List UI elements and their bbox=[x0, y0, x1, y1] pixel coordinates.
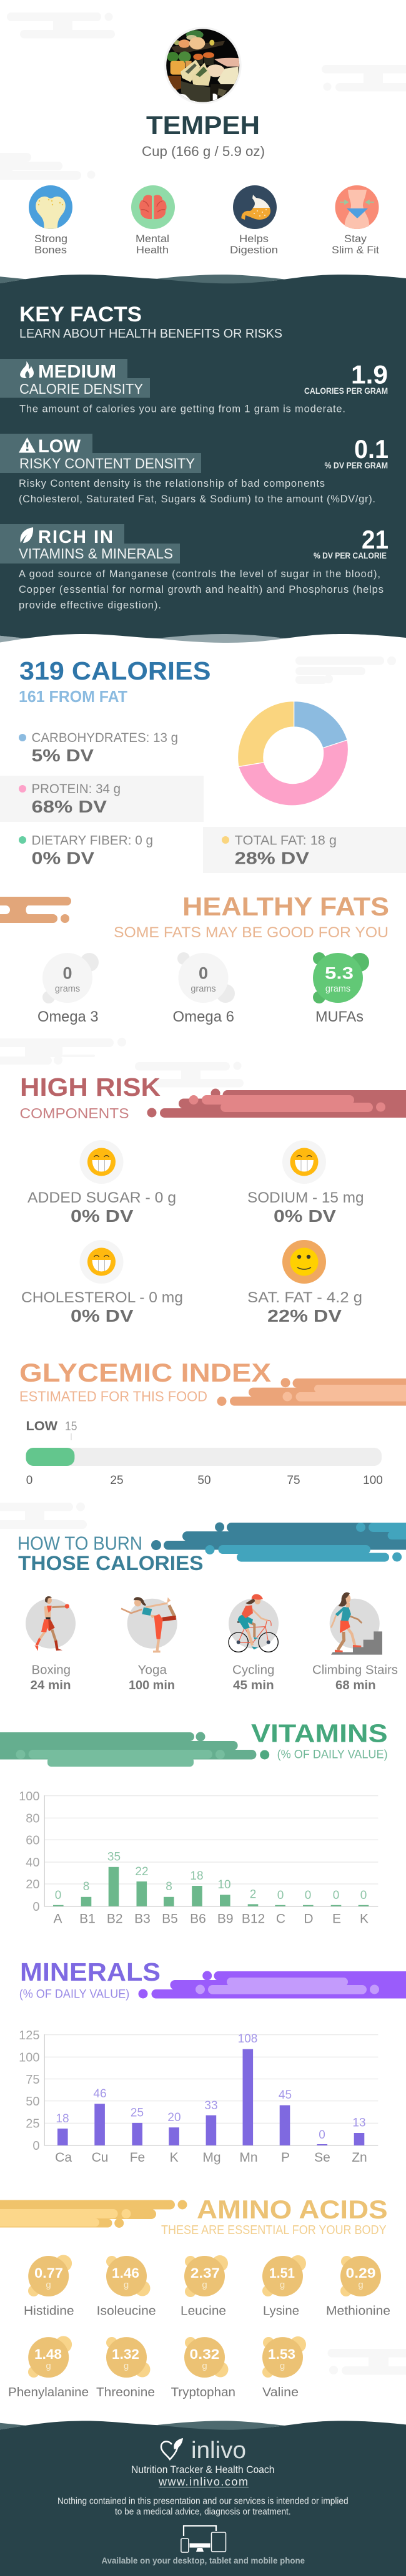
fact: risky content density: (Cholesterol, Saturated Fat, Sugars & Sodium) to the amount (%DV/gr). bbox=[19, 494, 375, 505]
bar chart: vitamins: 60 bbox=[26, 1833, 40, 1847]
omega 6: Omega 6 bbox=[172, 1008, 234, 1025]
header graphic: amino acids bbox=[0, 2200, 187, 2228]
risk: saturated fat: SAT. FAT - 4.2 g bbox=[247, 1289, 362, 1306]
isoleucine: Isoleucine bbox=[97, 2304, 156, 2318]
bar chart: vitamins: 18 bbox=[190, 1870, 204, 1883]
header graphic: healthy fats bbox=[0, 897, 71, 923]
donut chart bbox=[238, 701, 348, 806]
methionine: Methionine bbox=[326, 2304, 390, 2318]
subheading: components: COMPONENTS bbox=[20, 1105, 129, 1121]
label: helps digestion bbox=[230, 233, 278, 256]
fact: risky content density: % DV PER GRAM bbox=[325, 461, 388, 470]
fact: risky content density: RISKY CONTENT DENSITY bbox=[19, 455, 195, 471]
risk: cholesterol: 0% DV bbox=[71, 1306, 134, 1325]
bar chart: minerals: 0 bbox=[32, 2139, 40, 2153]
label: mental health: Health bbox=[136, 244, 169, 256]
label: strong bones bbox=[34, 233, 67, 256]
subheading: estimated: ESTIMATED FOR THIS FOOD bbox=[19, 1388, 207, 1404]
heading: high risk: HIGH RISK bbox=[20, 1073, 161, 1101]
risk: sodium: 0% DV bbox=[274, 1206, 336, 1226]
risk: cholesterol bbox=[21, 1240, 183, 1325]
bar chart: minerals: 0 bbox=[319, 2129, 325, 2142]
threonine: Threonine bbox=[96, 2386, 155, 2399]
glycemic index gauge: 15 bbox=[65, 1420, 77, 1433]
glycemic index gauge: 0 bbox=[26, 1474, 32, 1487]
label: mental health: Mental bbox=[136, 233, 169, 245]
bar chart: minerals: 125 bbox=[19, 2029, 40, 2042]
header graphic: burn calories bbox=[151, 1523, 406, 1562]
subheading: healthy fats: SOME FATS MAY BE GOOD FOR YOU bbox=[114, 924, 389, 941]
valine bbox=[262, 2336, 306, 2399]
isoleucine: g bbox=[124, 2280, 129, 2290]
header graphic: glycemic index bbox=[217, 1378, 406, 1406]
heading: how to burn: HOW TO BURN bbox=[17, 1533, 142, 1554]
header graphic: high risk bbox=[147, 1088, 406, 1118]
glycemic index gauge: 50 bbox=[197, 1474, 211, 1487]
label: helps digestion: Digestion bbox=[230, 244, 278, 256]
bar chart: minerals: Fe bbox=[130, 2150, 145, 2165]
exercise: climbing stairs bbox=[312, 1593, 398, 1692]
bar chart: vitamins: 0 bbox=[333, 1889, 339, 1902]
bar chart: minerals: 18 bbox=[56, 2112, 69, 2125]
exercise: yoga: Yoga bbox=[137, 1664, 167, 1677]
glycemic index gauge: 75 bbox=[287, 1474, 300, 1487]
subheading: from fat: 161 FROM FAT bbox=[19, 687, 127, 706]
fact: calorie density: 1.9 bbox=[351, 359, 388, 389]
bar chart: minerals: Ca bbox=[55, 2150, 72, 2165]
methionine: g bbox=[358, 2280, 364, 2290]
subheading: amino acids: THESE ARE ESSENTIAL FOR YOUR BODY bbox=[161, 2223, 387, 2237]
bar chart: vitamins: 0 bbox=[277, 1889, 284, 1902]
bar chart: vitamins: K bbox=[360, 1912, 369, 1926]
bar chart: minerals: 25 bbox=[131, 2107, 144, 2120]
icon: mental health bbox=[131, 185, 175, 229]
isoleucine bbox=[97, 2256, 156, 2318]
carbohydrates: 5% DV bbox=[31, 746, 94, 765]
omega 3 bbox=[37, 953, 99, 1025]
exercise: climbing stairs: Climbing Stairs bbox=[312, 1664, 398, 1677]
panel: footer bbox=[0, 2421, 406, 2576]
bar chart: minerals: 13 bbox=[352, 2117, 366, 2130]
bar chart: vitamins: 40 bbox=[26, 1856, 40, 1870]
disclaimer bbox=[57, 2496, 349, 2517]
fact: rich in vitamins and minerals: RICH IN bbox=[38, 527, 113, 547]
bar chart: vitamins: B12 bbox=[242, 1912, 265, 1926]
isoleucine: 1.46 bbox=[112, 2265, 139, 2281]
amino acids grid bbox=[8, 2255, 390, 2399]
bar chart: minerals: 50 bbox=[26, 2095, 40, 2109]
exercise: boxing: Boxing bbox=[31, 1664, 71, 1677]
tryptophan bbox=[171, 2337, 235, 2399]
fact: calorie density: The amount of calories you are getting from 1 gram is moderate. bbox=[19, 403, 345, 414]
bar chart: minerals: 45 bbox=[279, 2089, 292, 2102]
bar chart: vitamins: 20 bbox=[26, 1878, 40, 1891]
fact: rich in vitamins and minerals: Copper (essential for normal growth and health) and Phosphorus (helps bbox=[19, 584, 384, 595]
bar chart: vitamins: A bbox=[53, 1912, 62, 1926]
leucine: Leucine bbox=[181, 2304, 226, 2318]
icon: stair climber bbox=[331, 1593, 382, 1655]
bar chart: vitamins: 22 bbox=[135, 1865, 149, 1878]
protein bbox=[19, 782, 121, 816]
label: stay slim and fit bbox=[332, 233, 379, 256]
phenylalanine: 1.48 bbox=[34, 2346, 62, 2362]
subheading: minerals: (% OF DAILY VALUE) bbox=[19, 1988, 129, 2001]
histidine: Histidine bbox=[24, 2304, 74, 2318]
bar chart: minerals: Se bbox=[314, 2150, 330, 2165]
exercise: boxing bbox=[26, 1596, 76, 1692]
valine: g bbox=[280, 2361, 285, 2371]
bar chart: minerals bbox=[19, 2029, 378, 2165]
disclaimer: to be a medical advice, diagnosis or treatment. bbox=[115, 2507, 291, 2517]
heading: glycemic index: GLYCEMIC INDEX bbox=[19, 1358, 271, 1387]
bar chart: vitamins: B9 bbox=[217, 1912, 234, 1926]
risk: cholesterol: CHOLESTEROL - 0 mg bbox=[21, 1289, 183, 1306]
methionine bbox=[326, 2256, 390, 2318]
bar chart: minerals: Cu bbox=[92, 2150, 108, 2165]
label: strong bones: Strong bbox=[34, 233, 67, 245]
bar chart: minerals: P bbox=[281, 2150, 290, 2165]
bar chart: vitamins: 8 bbox=[166, 1880, 172, 1893]
exercise: cycling bbox=[229, 1594, 279, 1692]
food photo bbox=[162, 26, 244, 105]
bar chart: vitamins: 0 bbox=[360, 1889, 367, 1902]
heading: 319 calories: 319 CALORIES bbox=[19, 656, 210, 685]
leucine: g bbox=[202, 2280, 207, 2290]
total fat: TOTAL FAT: 18 g bbox=[235, 833, 337, 847]
phenylalanine: Phenylalanine bbox=[8, 2386, 89, 2399]
icon: devices bbox=[181, 2526, 226, 2552]
valine: 1.53 bbox=[268, 2346, 295, 2362]
risk: added sugar: 0% DV bbox=[71, 1206, 134, 1226]
bar chart: minerals: 25 bbox=[26, 2117, 40, 2130]
risk: sodium bbox=[247, 1140, 364, 1226]
icon: helps digestion bbox=[233, 185, 277, 229]
fact: calorie density: CALORIES PER GRAM bbox=[304, 386, 388, 396]
bar chart: vitamins: D bbox=[304, 1912, 314, 1926]
risk: sodium: SODIUM - 15 mg bbox=[247, 1189, 364, 1206]
header graphic: vitamins bbox=[0, 1732, 269, 1767]
bar chart: vitamins: 100 bbox=[19, 1790, 40, 1803]
heading: those calories: THOSE CALORIES bbox=[18, 1552, 204, 1574]
bar chart: minerals: 46 bbox=[93, 2087, 107, 2100]
bar chart: vitamins: B1 bbox=[79, 1912, 96, 1926]
exercise: cycling: Cycling bbox=[232, 1664, 275, 1677]
icon: grinning face bbox=[290, 1148, 319, 1176]
dietary fiber bbox=[19, 833, 153, 867]
availability note: Available on your desktop, tablet and mobile phone bbox=[101, 2555, 305, 2565]
mufas bbox=[313, 952, 369, 1025]
heading: key facts: KEY FACTS bbox=[19, 303, 142, 326]
mufas: MUFAs bbox=[315, 1008, 364, 1025]
bar chart: vitamins: 2 bbox=[250, 1888, 256, 1901]
risk: added sugar: ADDED SUGAR - 0 g bbox=[27, 1189, 176, 1206]
omega 3: grams bbox=[55, 984, 80, 994]
fact: rich in vitamins and minerals: VITAMINS & MINERALS bbox=[19, 545, 173, 562]
glycemic index gauge: 25 bbox=[110, 1474, 124, 1487]
bar chart: vitamins: 35 bbox=[107, 1850, 121, 1863]
icon: grinning face bbox=[87, 1248, 116, 1276]
fact: calorie density: MEDIUM bbox=[38, 362, 116, 382]
fact: risky content density bbox=[0, 434, 389, 505]
histidine bbox=[24, 2255, 74, 2318]
lysine: Lysine bbox=[263, 2304, 299, 2318]
valine: Valine bbox=[262, 2386, 299, 2399]
bar chart: minerals: 20 bbox=[167, 2111, 181, 2124]
bar chart: minerals: 75 bbox=[26, 2073, 40, 2087]
fact: risky content density: Risky Content density is the relationship of bad components bbox=[19, 478, 325, 489]
methionine: 0.29 bbox=[346, 2265, 376, 2281]
exercise: yoga: 100 min bbox=[129, 1679, 175, 1692]
leucine bbox=[181, 2255, 228, 2318]
label: mental health bbox=[136, 233, 169, 256]
glycemic index gauge bbox=[26, 1419, 383, 1487]
leucine: 2.37 bbox=[191, 2265, 220, 2281]
omega 3: 0 bbox=[62, 964, 72, 983]
total fat: 28% DV bbox=[235, 849, 309, 867]
tryptophan: g bbox=[202, 2361, 207, 2371]
heading: minerals: MINERALS bbox=[20, 1958, 161, 1986]
lysine bbox=[262, 2255, 306, 2318]
fact: rich in vitamins and minerals: provide effective digestion). bbox=[19, 600, 161, 611]
header graphic: minerals bbox=[139, 1971, 406, 1998]
bar chart: minerals: Mg bbox=[202, 2150, 221, 2165]
bar chart: vitamins: 0 bbox=[32, 1900, 40, 1914]
omega 6 bbox=[172, 952, 235, 1025]
omega 6: 0 bbox=[199, 964, 208, 983]
fact: calorie density bbox=[0, 359, 388, 414]
tagline: Nutrition Tracker & Health Coach bbox=[131, 2464, 275, 2476]
fact: calorie density: CALORIE DENSITY bbox=[19, 381, 143, 397]
threonine: 1.32 bbox=[112, 2346, 139, 2362]
bar chart: vitamins: 0 bbox=[305, 1889, 311, 1902]
bar chart: vitamins: B2 bbox=[107, 1912, 123, 1926]
label: strong bones: Bones bbox=[34, 244, 67, 256]
exercise: yoga bbox=[121, 1597, 177, 1692]
exercise: climbing stairs: 68 min bbox=[335, 1679, 376, 1692]
subheading: vitamins: (% OF DAILY VALUE) bbox=[277, 1749, 388, 1762]
tryptophan: Tryptophan bbox=[171, 2386, 235, 2399]
threonine: g bbox=[124, 2361, 129, 2371]
omega 6: grams bbox=[191, 984, 216, 994]
bar chart: minerals: 108 bbox=[238, 2032, 257, 2046]
icon: boxer bbox=[34, 1596, 69, 1651]
risk: added sugar bbox=[27, 1140, 176, 1226]
serving size: Cup (166 g / 5.9 oz) bbox=[142, 144, 265, 159]
bar chart: vitamins: B3 bbox=[134, 1912, 151, 1926]
glycemic index gauge: LOW bbox=[26, 1419, 57, 1433]
heading: healthy fats: HEALTHY FATS bbox=[182, 892, 389, 921]
bar chart: vitamins: C bbox=[276, 1912, 285, 1926]
bar chart: minerals: 33 bbox=[204, 2099, 218, 2112]
fact: risky content density: 0.1 bbox=[354, 434, 389, 464]
histidine: 0.77 bbox=[34, 2265, 63, 2281]
website: www.inlivo.com bbox=[158, 2476, 248, 2488]
bar chart: minerals: 100 bbox=[19, 2051, 40, 2064]
logo: inlivo: inlivo bbox=[191, 2437, 246, 2464]
bar chart: minerals: Mn bbox=[239, 2150, 258, 2165]
heading: amino acids: AMINO ACIDS bbox=[197, 2195, 388, 2224]
dietary fiber: 0% DV bbox=[31, 849, 94, 867]
phenylalanine: g bbox=[46, 2361, 51, 2371]
fact: rich in vitamins and minerals: 21 bbox=[362, 525, 389, 554]
total fat bbox=[222, 833, 337, 867]
panel: key facts bbox=[0, 275, 406, 643]
threonine bbox=[96, 2337, 155, 2399]
lysine: 1.51 bbox=[269, 2265, 295, 2281]
bar chart: vitamins: E bbox=[332, 1912, 341, 1926]
bar chart: minerals: K bbox=[170, 2150, 179, 2165]
label: stay slim and fit: Stay bbox=[344, 233, 367, 245]
fact: rich in vitamins and minerals: A good source of Manganese (controls the level of sugar in the blood), bbox=[19, 568, 380, 580]
histidine: g bbox=[46, 2280, 51, 2290]
tryptophan: 0.32 bbox=[190, 2346, 220, 2362]
fact: rich in vitamins and minerals bbox=[0, 524, 389, 611]
icon: cyclist bbox=[229, 1594, 278, 1652]
icon: smiling face bbox=[290, 1248, 319, 1276]
exercise: cycling: 45 min bbox=[233, 1679, 274, 1692]
bar chart: vitamins: 80 bbox=[26, 1812, 40, 1826]
logo: inlivo bbox=[161, 2437, 246, 2464]
icon: yoga figure bbox=[121, 1597, 176, 1652]
disclaimer: Nothing contained in this presentation and our services is intended or implied bbox=[57, 2496, 349, 2506]
risk: saturated fat bbox=[247, 1240, 362, 1325]
carbohydrates: CARBOHYDRATES: 13 g bbox=[31, 731, 178, 745]
bar chart: vitamins: B6 bbox=[190, 1912, 206, 1926]
icon: stay slim bbox=[335, 185, 379, 229]
subheading: LEARN ABOUT HEALTH BENEFITS OR RISKS bbox=[19, 327, 282, 341]
bar chart: vitamins: 10 bbox=[217, 1878, 231, 1891]
dietary fiber: DIETARY FIBER: 0 g bbox=[31, 833, 153, 847]
bar chart: vitamins: 8 bbox=[83, 1880, 89, 1893]
fact: rich in vitamins and minerals: % DV PER CALORIE bbox=[314, 551, 387, 560]
bar chart: minerals: Zn bbox=[352, 2150, 367, 2165]
icon: grinning face bbox=[87, 1148, 116, 1176]
fact: risky content density: LOW bbox=[38, 436, 81, 456]
mufas: grams bbox=[325, 984, 350, 994]
label: helps digestion: Helps bbox=[239, 233, 269, 245]
benefits row bbox=[29, 185, 379, 256]
title: TEMPEH bbox=[146, 110, 260, 140]
mufas: 5.3 bbox=[325, 964, 354, 983]
bar chart: vitamins: 0 bbox=[55, 1889, 61, 1902]
legend: macronutrients bbox=[0, 731, 406, 873]
icon: strong bones bbox=[29, 185, 72, 229]
label: stay slim and fit: Slim & Fit bbox=[332, 244, 379, 256]
phenylalanine bbox=[8, 2336, 89, 2399]
glycemic index gauge: 100 bbox=[363, 1474, 383, 1487]
heading: vitamins: VITAMINS bbox=[251, 1719, 388, 1747]
exercise: boxing: 24 min bbox=[30, 1679, 71, 1692]
protein: 68% DV bbox=[31, 797, 107, 816]
omega 3: Omega 3 bbox=[37, 1008, 99, 1025]
carbohydrates bbox=[19, 731, 178, 765]
lysine: g bbox=[280, 2280, 285, 2290]
protein: PROTEIN: 34 g bbox=[31, 782, 121, 796]
bar chart: vitamins bbox=[19, 1790, 378, 1926]
bar chart: vitamins: B5 bbox=[162, 1912, 178, 1926]
risk: saturated fat: 22% DV bbox=[267, 1306, 342, 1325]
